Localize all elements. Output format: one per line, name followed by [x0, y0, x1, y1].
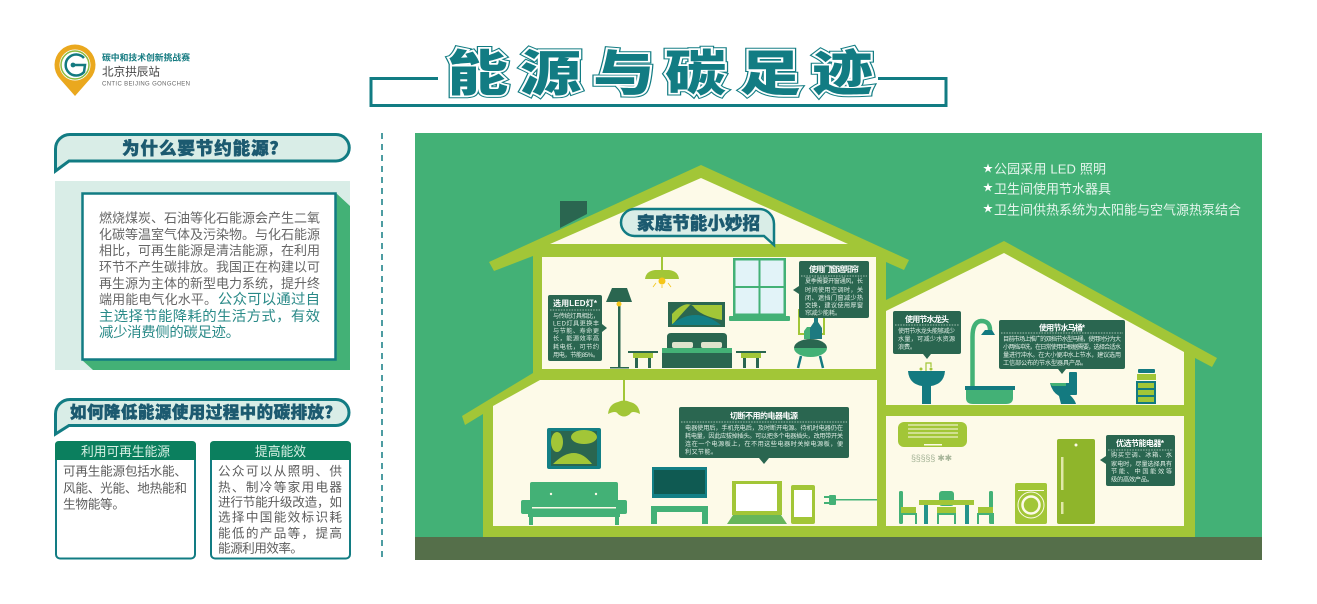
- callout: faucet: 水量，可减少水资源: [898, 335, 955, 343]
- card: improve efficiency: 能低的产品等，提高: [218, 526, 342, 540]
- icon: TV on stand: [651, 467, 708, 524]
- icon: storage shelf: [1136, 369, 1156, 404]
- callout: faucet: 使用节水龙头: [905, 314, 949, 324]
- card: improve efficiency: 能源利用效率。: [218, 540, 303, 556]
- callout: LED lamps: 与节能、寿命更: [553, 327, 599, 335]
- divider: [381, 133, 383, 560]
- panel: why save energy: 公众可以通过自: [218, 291, 320, 308]
- icon: ceiling lamp upstairs: [645, 256, 679, 288]
- callout: unplug: 连在一个电源板上，在不用这些电器时关掉电源板，便: [685, 440, 843, 448]
- icon: dining set: [899, 491, 993, 524]
- callout: unplug: 切断不用的电器电源: [730, 410, 798, 420]
- callout: curtains: [793, 261, 869, 318]
- panel: house scene background: [415, 133, 1262, 560]
- heading bubble: home tips: [621, 209, 774, 245]
- icon: sink: [908, 363, 945, 404]
- card: improve efficiency: 热、制冷等家用电器: [218, 480, 342, 494]
- panel: why save energy: 主选择节能降耗的生活方式，有效: [99, 308, 320, 325]
- icon: ceiling lamp downstairs: [608, 380, 640, 416]
- card: renewable energy: 风能、光能、地热能和: [63, 482, 187, 496]
- callout: efficient appliances: 家电时，尽量选择具有: [1111, 460, 1172, 468]
- title: 能源与碳足迹: [447, 46, 873, 101]
- callout: toilet: 工信部公布的节水型器具产品。: [1003, 359, 1087, 367]
- callout: efficient appliances: 节能、中国能效等: [1111, 468, 1172, 476]
- callout: LED lamps: 选用LED灯*: [553, 298, 598, 308]
- icon: nightstands: [628, 351, 766, 368]
- heading bubble: home tips: 家庭节能小妙招: [637, 214, 760, 234]
- tips list: 公园采用 LED 照明: [994, 162, 1106, 176]
- card: improve efficiency: 公众可以从照明、供: [218, 464, 342, 478]
- heading bubble: how to lower emissions: 如何降低能源使用过程中的碳排放？: [70, 402, 341, 422]
- callout: LED lamps: [548, 295, 607, 361]
- callout: unplug: [679, 407, 849, 464]
- card: improve efficiency: [210, 441, 351, 558]
- callout: faucet: 使用节水龙头能够减少: [898, 327, 955, 335]
- icon: side table and vases: [794, 310, 827, 368]
- callout: efficient appliances: 级的高效产品。: [1111, 476, 1153, 484]
- icon: air conditioner: [898, 422, 967, 463]
- card: improve efficiency: 进行节能升级改造，如: [218, 494, 342, 510]
- logo: [54, 45, 190, 96]
- tips list: 卫生间使用节水器具: [994, 182, 1111, 196]
- callout: toilet: [999, 320, 1125, 374]
- icon: washing machine: [1015, 483, 1047, 524]
- card: renewable energy: [55, 441, 196, 558]
- callout: unplug: 利又节能。: [685, 448, 717, 456]
- icon: toilet: [1050, 372, 1077, 404]
- callout: unplug: 耗电量，因此应拔掉插头。可以把多个电器插头，改用带开关: [685, 432, 843, 440]
- callout: LED lamps: 用电，节能85%。: [553, 351, 599, 359]
- panel: why save energy: 化碳等温室气体及污染物。与化石能源: [99, 227, 320, 242]
- tips list: ★: [983, 183, 993, 194]
- panel: why save energy: 减少消费侧的碳足迹。: [99, 324, 240, 341]
- callout: faucet: [893, 311, 961, 359]
- icon: plug and cord: [824, 495, 877, 505]
- callout: curtains: 时间使用空调时，关: [805, 286, 863, 294]
- logo: 碳中和技术创新挑战赛: [102, 52, 190, 62]
- tips list: ★: [983, 164, 993, 175]
- tips list: [983, 162, 1241, 218]
- icon: sofa: [521, 482, 627, 525]
- callout: toilet: 小两档冲洗，在日常使用中根据需要，选择合适水: [1003, 343, 1122, 351]
- icon: phone: [791, 485, 815, 524]
- callout: curtains: 夏季需要开窗通风，长: [805, 277, 863, 285]
- heading bubble: how to lower emissions: [56, 400, 349, 434]
- icon: bedroom painting: [668, 302, 725, 327]
- icon: bed: [662, 333, 732, 368]
- logo: 北京拱辰站: [102, 64, 160, 78]
- icon: fridge: [1057, 439, 1095, 524]
- icon: air conditioner: §§§§§ ✱✱: [911, 453, 952, 463]
- right house structure: [886, 241, 1217, 537]
- callout: LED lamps: 耗电低，可节约: [553, 343, 599, 351]
- title: 能源与碳足迹: [447, 46, 873, 101]
- card: improve efficiency: 选择中国能效标识耗: [218, 510, 342, 524]
- callout: LED lamps: 长，能源效率高: [553, 334, 599, 342]
- callout: unplug: 电器使用后，手机充电后，及时断开电源。待机时电器仍在: [685, 424, 843, 432]
- icon: floor lamp: [606, 288, 632, 368]
- callout: efficient appliances: [1100, 435, 1175, 486]
- panel: why save energy: 相比，可再生能源是清洁能源，在利用: [99, 243, 320, 258]
- main house structure: [462, 165, 909, 537]
- callout: faucet: 浪费。: [898, 343, 916, 351]
- panel: why save energy: 燃烧煤炭、石油等化石能源会产生二氧: [99, 210, 320, 226]
- title: [371, 46, 946, 106]
- panel: why save energy: 端用能电气化水平。: [99, 292, 217, 307]
- callout: toilet: 量进行冲水。在大小便冲水上节水，建议选用: [1003, 351, 1121, 359]
- callout: toilet: 使用节水马桶*: [1039, 322, 1086, 332]
- card: improve efficiency: 提高能效: [255, 444, 306, 459]
- heading bubble: why save energy: 为什么要节约能源？: [122, 138, 287, 158]
- card: renewable energy: 利用可再生能源: [81, 444, 170, 459]
- chimney: [560, 201, 587, 228]
- panel: why save energy: 再生源为主体的新型电力系统，提升终: [99, 276, 320, 291]
- logo: CNTIC BEIJING GONGCHEN: [102, 82, 190, 88]
- callout: toilet: 目前市场上推广的双档节水型马桶，使用时分为大: [1003, 335, 1121, 343]
- callout: LED lamps: LED灯具更换丰: [553, 320, 599, 328]
- callout: curtains: 使用门窗遮阳帘: [809, 264, 859, 274]
- heading bubble: why save energy: [56, 134, 349, 171]
- icon: living room picture: [547, 428, 601, 469]
- panel: why save energy: [55, 181, 350, 370]
- panel: why save energy: 环节不产生碳排放。我国正在构建以可: [99, 260, 320, 274]
- card: renewable energy: 可再生能源包括水能、: [63, 464, 187, 478]
- tips list: ★: [983, 204, 993, 215]
- callout: efficient appliances: 优选节能电器*: [1116, 438, 1165, 448]
- card: renewable energy: 生物能等。: [63, 496, 125, 512]
- callout: efficient appliances: 购买空调、冰箱、水: [1111, 451, 1173, 459]
- tips list: 卫生间供热系统为太阳能与空气源热泵结合: [994, 202, 1241, 218]
- callout: curtains: 交换，建议使用厚窗: [805, 302, 863, 310]
- callout: LED lamps: 与传统灯具相比，: [553, 312, 599, 320]
- callout: curtains: 帘减少能耗。: [805, 309, 841, 317]
- callout: curtains: 闭、遮挡门窗减少热: [805, 294, 864, 302]
- icon: window: [729, 258, 790, 321]
- icon: shower and tub: [965, 321, 1015, 404]
- icon: laptop: [727, 481, 787, 524]
